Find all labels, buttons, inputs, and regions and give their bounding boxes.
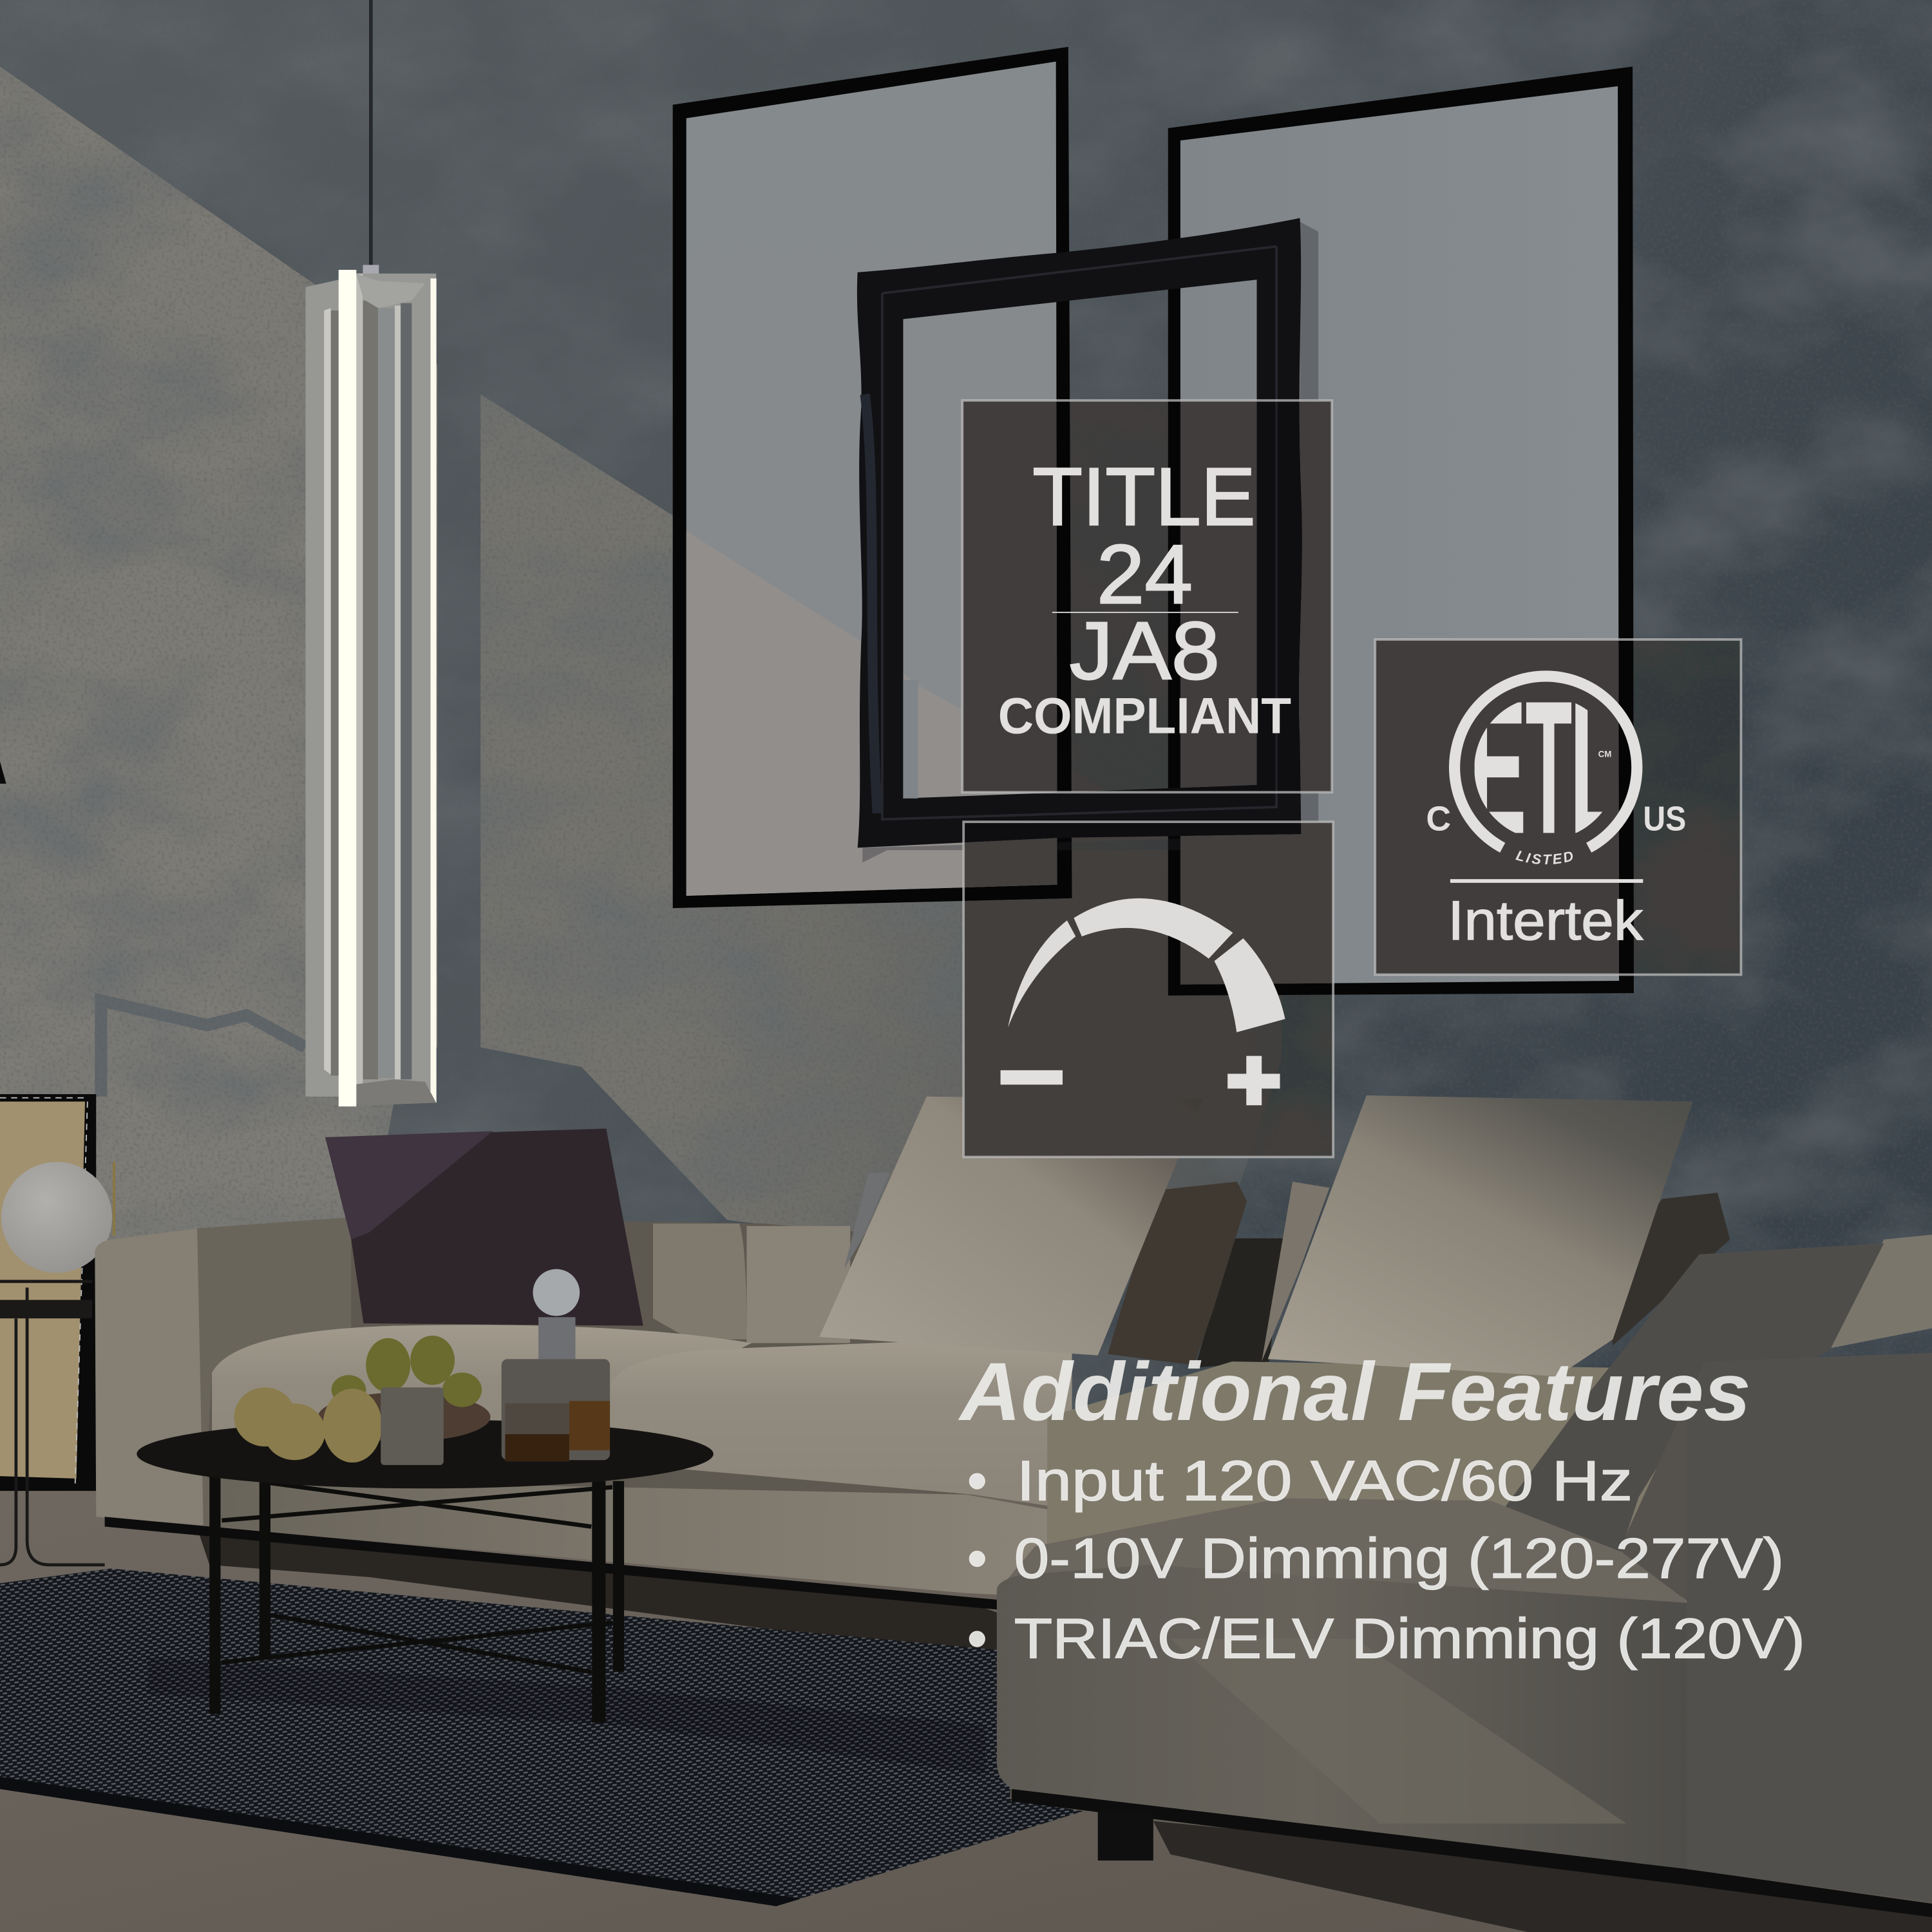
feature: 0-10V: 0-10V Dimming (120-277V) [1014, 1526, 1784, 1590]
feature: 0-10V: • [967, 1526, 987, 1590]
text: CM: CM [1598, 750, 1611, 759]
bowl [318, 1392, 490, 1442]
floor shadow under sofa [197, 1528, 1109, 1657]
canopy [363, 265, 379, 275]
back cushion A [653, 1224, 746, 1340]
gray pillow [1490, 1243, 1884, 1553]
right window [401, 303, 412, 1079]
back left panel [305, 279, 339, 1097]
back cushion B [746, 1226, 850, 1343]
concrete blotches [0, 0, 1932, 1528]
text: US: US [1643, 800, 1686, 838]
second seat cushion [610, 1340, 1072, 1510]
dark pillow right [1602, 1193, 1730, 1345]
centre window [363, 301, 378, 1079]
floor shadow under chaise [1153, 1821, 1932, 1932]
plinth [1012, 1789, 1932, 1917]
seat cushion right [1047, 1361, 1688, 1602]
concrete speckle [0, 0, 1932, 1528]
corner pillow [1819, 1235, 1932, 1350]
right strip [395, 305, 401, 1079]
globe lamp [1, 1162, 115, 1273]
icon: ETL ring [1455, 676, 1637, 848]
shadow of wooden frame [862, 222, 1318, 862]
small pillow behind left cushion [844, 1173, 889, 1269]
pomegranates [234, 1387, 382, 1463]
centre gray strip [378, 308, 395, 1078]
text: 24: 24 [1097, 527, 1193, 621]
pendant cord [369, 0, 373, 267]
purple cushion [325, 1129, 643, 1326]
light right edge [430, 278, 437, 1103]
second gray pillow [1619, 1361, 1705, 1602]
sunlight on left print [687, 531, 1057, 896]
left inner strip [324, 308, 331, 1074]
ETL letters: T [1526, 661, 1572, 873]
left arm [95, 1229, 204, 1526]
feature: input: • [967, 1448, 987, 1512]
wooden picture frame [857, 218, 1302, 848]
lamp shadow strips on wall [101, 1001, 305, 1097]
text: Intertek: Intertek [1448, 890, 1643, 952]
sunlit wall wedge, centre [480, 394, 1282, 1282]
icon: dimmer arc [1008, 898, 1285, 1032]
framed print: right [1168, 66, 1634, 996]
beige pillow right [1268, 1095, 1693, 1376]
small pillow [1262, 1182, 1329, 1361]
icon: plus [1227, 1056, 1280, 1105]
top connector [356, 274, 425, 308]
glass [381, 1387, 444, 1465]
decanter [502, 1269, 610, 1461]
ETL letters: E [1469, 661, 1527, 873]
pendant lamp [305, 265, 437, 1106]
small black lamp tip at left edge [0, 761, 6, 784]
print shadow inside frame [903, 680, 918, 799]
plinth [105, 1517, 1047, 1614]
divider [1450, 879, 1643, 883]
floor [0, 1472, 1932, 1932]
leg [1098, 1811, 1153, 1861]
main sofa [95, 1129, 1072, 1614]
sun patch on chaise front [1171, 1639, 1627, 1824]
feature: TRIAC/ELV: TRIAC/ELV Dimming (120V) [1014, 1606, 1805, 1670]
bottom connector [356, 1079, 436, 1105]
right arm [1687, 1353, 1932, 1902]
feature: TRIAC/ELV: • [967, 1606, 987, 1670]
divider [1052, 612, 1238, 613]
chaise front [997, 1565, 1688, 1869]
light bar [339, 270, 356, 1106]
sofa back centre, dark [1195, 1238, 1284, 1368]
canvas leaning on wall [0, 1094, 96, 1491]
pears [332, 1336, 482, 1407]
wall in shadow [0, 0, 1932, 1528]
left strip [356, 274, 363, 1101]
panel: ETL listed Intertek [1374, 638, 1743, 976]
sofa back section, dark [197, 1217, 966, 1528]
text: JA8: JA8 [1070, 605, 1220, 696]
chaise sofa [997, 1499, 1932, 1917]
additional features text [958, 1346, 1805, 1670]
base [204, 1479, 1047, 1597]
panel: ETL listed Intertek: L [1569, 661, 1622, 873]
ETL letters [1475, 702, 1602, 833]
beige pillow left [819, 1097, 1202, 1356]
side table [0, 1282, 105, 1565]
text: TITLE: TITLE [1032, 451, 1256, 542]
text: COMPLIANT: COMPLIANT [998, 687, 1291, 744]
heading: Additional Features [958, 1346, 1751, 1438]
centre panel [356, 274, 436, 1101]
left seat cushion [212, 1325, 752, 1479]
icon: minus [1001, 1070, 1063, 1084]
rug [0, 1569, 1083, 1906]
panel: Title 24 JA8 compliant [962, 401, 1332, 792]
panel: dimmer [963, 822, 1333, 1157]
text: C: C [1426, 800, 1451, 838]
left window [331, 310, 339, 1075]
chaise seat [997, 1499, 1688, 1603]
dark pillow behind [1108, 1182, 1247, 1365]
text: LISTED: LISTED [1515, 850, 1573, 864]
coffee table [137, 1269, 714, 1723]
feature: input: Input 120 VAC/60 Hz [1016, 1448, 1633, 1512]
sunlit wall patch, left [0, 66, 437, 1528]
framed print: left [673, 47, 1072, 908]
tray [137, 1419, 714, 1488]
photo background: living room scene [0, 0, 1932, 1528]
